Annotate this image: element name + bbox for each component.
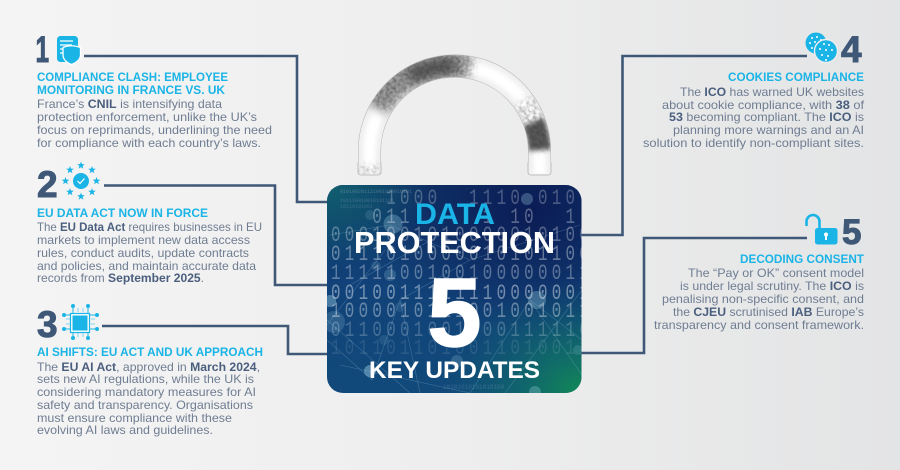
binary code rows: 0110001001000111110: [331, 318, 593, 343]
binary code rows: 101110010010101101: [340, 198, 394, 204]
lock title: DATA: DATA: [415, 198, 495, 231]
body text: and policies, and maintain accurate data: [37, 259, 256, 273]
number 2: 2: [37, 164, 58, 205]
binary code rows: 10101010101010100: [443, 384, 505, 391]
body text: considering mandatory measures for AI: [37, 385, 256, 399]
network lines: [327, 225, 582, 393]
number 5: 5: [842, 213, 861, 252]
connector 2: [104, 186, 328, 285]
body text: planning more warnings and an AI: [673, 123, 864, 137]
padlock shackle: [358, 65, 551, 175]
binary code rows: 10110101001: [340, 204, 373, 210]
body text: [37, 220, 262, 285]
icon: cookies: [806, 32, 838, 62]
body text: 53 becoming compliant. The ICO is: [669, 110, 864, 124]
panel: item 1 compliance clash: [36, 29, 272, 150]
body text: France’s CNIL is intensifying data: [37, 97, 222, 111]
body text: [37, 97, 272, 150]
body text: The ICO has warned UK websites: [680, 85, 864, 99]
number 3: 3: [37, 304, 58, 345]
panel: item 2 EU Data Act: [37, 162, 262, 285]
body text: The EU Data Act requires businesses in EU: [37, 220, 262, 234]
body text: records from September 2025.: [37, 271, 204, 285]
binary code rows: 0001001010000010100: [331, 223, 593, 248]
body text: penalising non-specific consent, and: [662, 292, 864, 306]
heading: EU DATA ACT NOW IN FORCE: [37, 206, 208, 220]
lock subtitle: KEY UPDATES: KEY UPDATES: [369, 357, 540, 384]
body text: [643, 85, 865, 150]
connector 4: [581, 56, 807, 235]
number 4: 4: [841, 29, 862, 70]
binary code rows: 0010011111110000001: [331, 281, 593, 306]
binary code rows: 1111100100100000011: [331, 261, 593, 286]
body text: markets to implement new data access: [37, 233, 250, 247]
heading: DECODING CONSENT: [740, 252, 865, 266]
binary code rows: 1000010111001001011: [331, 299, 593, 324]
body text: for compliance with each country’s laws.: [37, 136, 261, 150]
icon: document with shield: [57, 36, 80, 64]
icon: EU stars with check: [62, 162, 100, 200]
padlock body: [327, 185, 582, 393]
binary code rows: 010100201121001010010101: [340, 189, 412, 195]
body text: [37, 360, 260, 437]
binary code rows: [332, 190, 582, 389]
body text: focus on reprimands, underlining the need: [37, 123, 272, 137]
lock big number 5: 5: [428, 258, 481, 367]
panel: item 5 decoding consent: [654, 213, 865, 332]
body text: must ensure compliance with these: [37, 411, 232, 425]
body text: transparency and consent framework.: [654, 318, 864, 332]
heading: MONITORING IN FRANCE VS. UK: [37, 83, 225, 97]
number 1: 1: [36, 29, 49, 70]
panel: item 4 cookies compliance: [643, 29, 865, 150]
binary code rows: 0111010000010101100: [331, 242, 593, 267]
binary code rows: 011 1 10 1 0: [331, 205, 607, 230]
body text: about cookie compliance, with 38 of: [662, 98, 865, 112]
connector 1: [84, 56, 328, 202]
binary code rows: 1011011010011010011: [331, 336, 593, 361]
panel: item 3 AI shifts: [37, 304, 263, 437]
body text: sets new AI regulations, while the UK is: [37, 372, 254, 386]
body text: rules, conduct audits, update contracts: [37, 246, 249, 260]
icon: open padlock: [806, 215, 838, 244]
body text: protection enforcement, unlike the UK’s: [37, 110, 257, 124]
body text: [654, 266, 864, 332]
network nodes: [323, 193, 583, 398]
icon: AI chip: [62, 304, 99, 340]
body text: The “Pay or OK” consent model: [688, 266, 864, 280]
connector 3: [102, 326, 328, 354]
body text: The EU AI Act, approved in March 2024,: [37, 360, 260, 374]
body text: safety and transparency. Organisations: [37, 398, 253, 412]
lock title: PROTECTION: PROTECTION: [354, 225, 555, 260]
body text: the CJEU scrutinised IAB Europe’s: [673, 305, 864, 319]
connector 5: [581, 238, 807, 353]
heading: [37, 70, 228, 97]
heading: COOKIES COMPLIANCE: [728, 70, 864, 84]
body text: evolving AI laws and guidelines.: [37, 423, 213, 437]
binary code rows: 1000 1110 010: [331, 186, 579, 211]
body text: is under legal scrutiny. The ICO is: [680, 279, 864, 293]
body text: solution to identify non-compliant sites.: [643, 136, 864, 150]
heading: COMPLIANCE CLASH: EMPLOYEE: [37, 70, 228, 84]
heading: AI SHIFTS: EU ACT AND UK APPROACH: [37, 345, 263, 359]
